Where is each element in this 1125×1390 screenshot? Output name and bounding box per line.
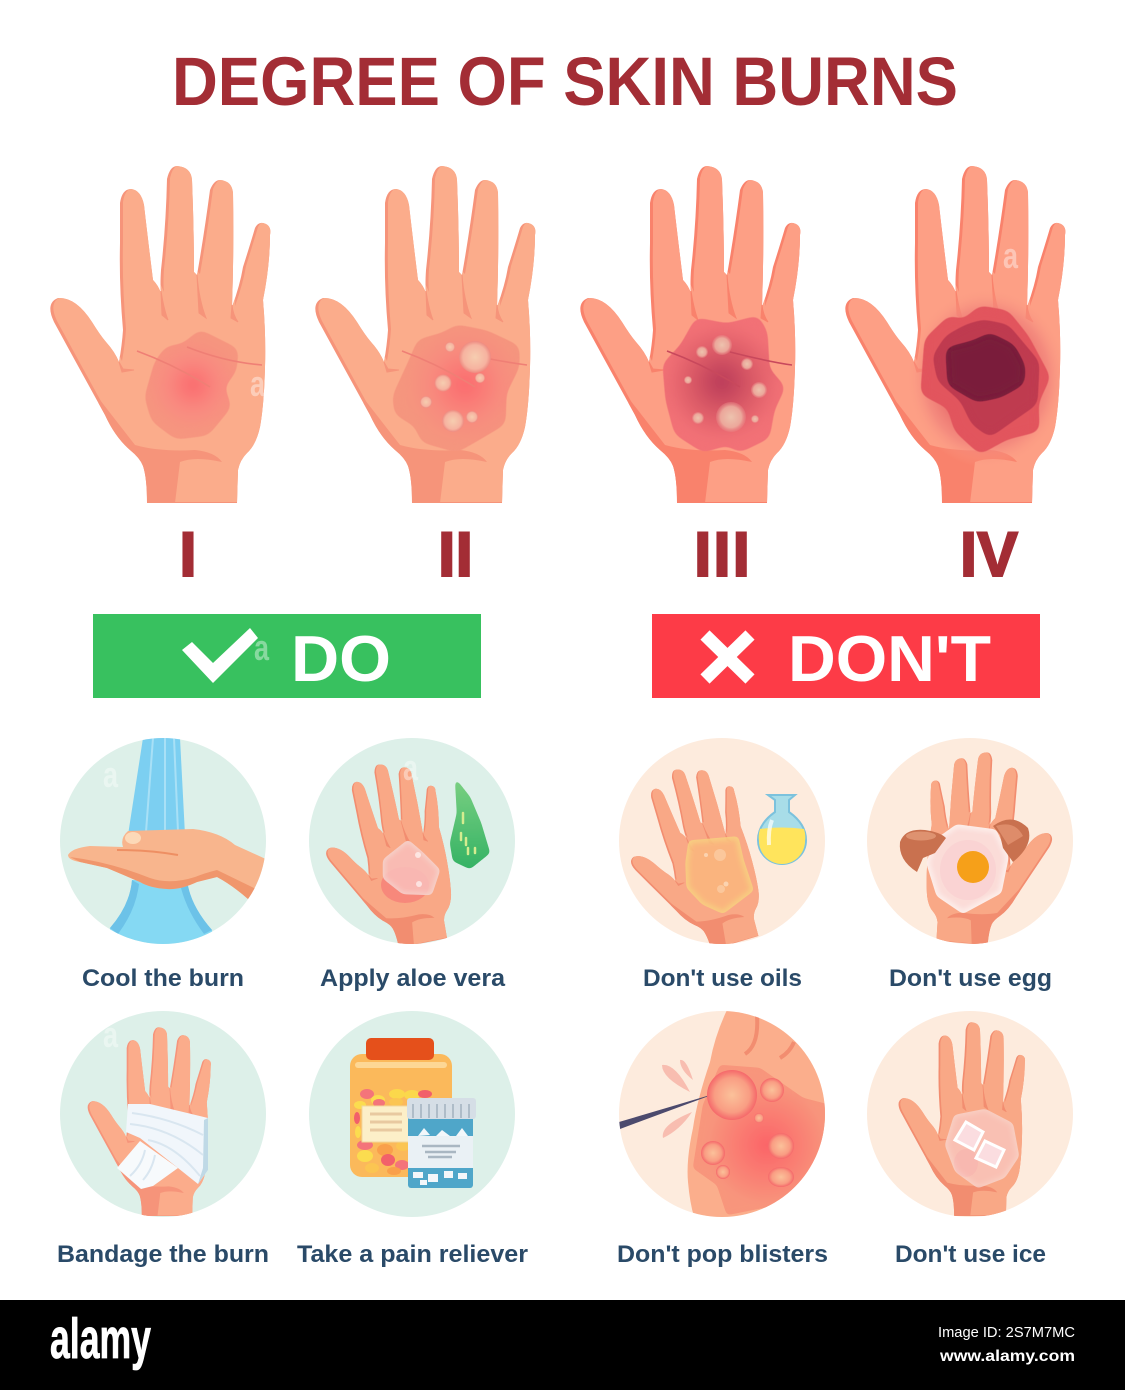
panel: bandage the burn xyxy=(60,1011,266,1217)
hand xyxy=(899,1022,1027,1216)
bandage wrap xyxy=(117,1104,208,1189)
banner: do: a xyxy=(254,627,270,668)
label: apply aloe vera: Apply aloe vera xyxy=(320,965,506,992)
hand with oil xyxy=(631,770,759,944)
skin xyxy=(688,1010,830,1220)
splash marks xyxy=(662,1060,693,1138)
degree numeral II: II xyxy=(438,520,473,590)
panel: apply aloe vera: a xyxy=(403,747,419,788)
degree numeral I: I xyxy=(179,520,197,590)
icon: oil flask xyxy=(758,795,806,864)
panel: bandage the burn: a xyxy=(103,1014,119,1055)
degree numeral III: III xyxy=(694,520,750,590)
label: take a pain reliever: Take a pain reliever xyxy=(297,1241,528,1268)
panel: cool the burn xyxy=(60,738,268,950)
hand under water xyxy=(68,829,268,899)
eggshell left xyxy=(900,830,946,872)
label: don't pop blisters: Don't pop blisters xyxy=(617,1241,828,1268)
hand: second degree burn xyxy=(315,165,538,503)
panel: cool the burn: a xyxy=(103,754,119,795)
banner: don't xyxy=(652,614,1040,698)
hand: fourth degree burn: a xyxy=(1003,235,1019,276)
egg white xyxy=(928,826,1007,912)
banner: don't: DON'T xyxy=(788,622,991,695)
panel: don't use ice xyxy=(867,1011,1073,1217)
degree numeral IV: IV xyxy=(960,520,1018,590)
egg yolk xyxy=(957,851,989,883)
hand: first degree burn xyxy=(50,165,273,503)
icon: aloe leaf xyxy=(450,778,490,869)
footer bar xyxy=(0,1300,1125,1390)
large blister xyxy=(707,1070,757,1120)
panel: don't pop blisters xyxy=(619,1010,830,1220)
orange pill jar xyxy=(350,1038,452,1177)
hand xyxy=(926,752,1052,944)
water stream xyxy=(108,738,215,950)
hand: first degree burn: a xyxy=(250,363,266,404)
website: www.alamy.com xyxy=(939,1348,1075,1365)
fold lines xyxy=(745,1016,794,1058)
label: don't use egg: Don't use egg xyxy=(889,965,1052,992)
burn area xyxy=(693,1065,830,1215)
alamy logo: alamy xyxy=(50,1307,151,1371)
eggshell right xyxy=(993,819,1029,862)
blue pill jar xyxy=(407,1098,476,1188)
hand: third degree burn xyxy=(580,165,803,503)
banner: do: DO xyxy=(291,622,391,695)
panel: take a pain reliever xyxy=(309,1011,515,1217)
banner: do xyxy=(93,614,481,698)
image id: Image ID: 2S7M7MC xyxy=(938,1324,1075,1341)
melted ice wrap xyxy=(946,1110,1018,1187)
hand with gel xyxy=(326,764,452,944)
hand: fourth degree burn xyxy=(845,165,1069,503)
label: don't use oils: Don't use oils xyxy=(643,965,802,992)
ice cube xyxy=(955,1122,983,1150)
panel: apply aloe vera xyxy=(309,738,515,958)
small blisters xyxy=(701,1078,794,1187)
title: DEGREE OF SKIN BURNS xyxy=(172,43,958,120)
label: don't use ice: Don't use ice xyxy=(895,1241,1046,1268)
ice cube xyxy=(976,1141,1004,1167)
panel: don't use egg xyxy=(867,738,1073,950)
panel: don't use oils xyxy=(619,738,825,944)
label: cool the burn: Cool the burn xyxy=(82,965,244,992)
pin needle xyxy=(619,1096,708,1129)
label: bandage the burn: Bandage the burn xyxy=(57,1241,269,1268)
hand xyxy=(88,1027,213,1216)
